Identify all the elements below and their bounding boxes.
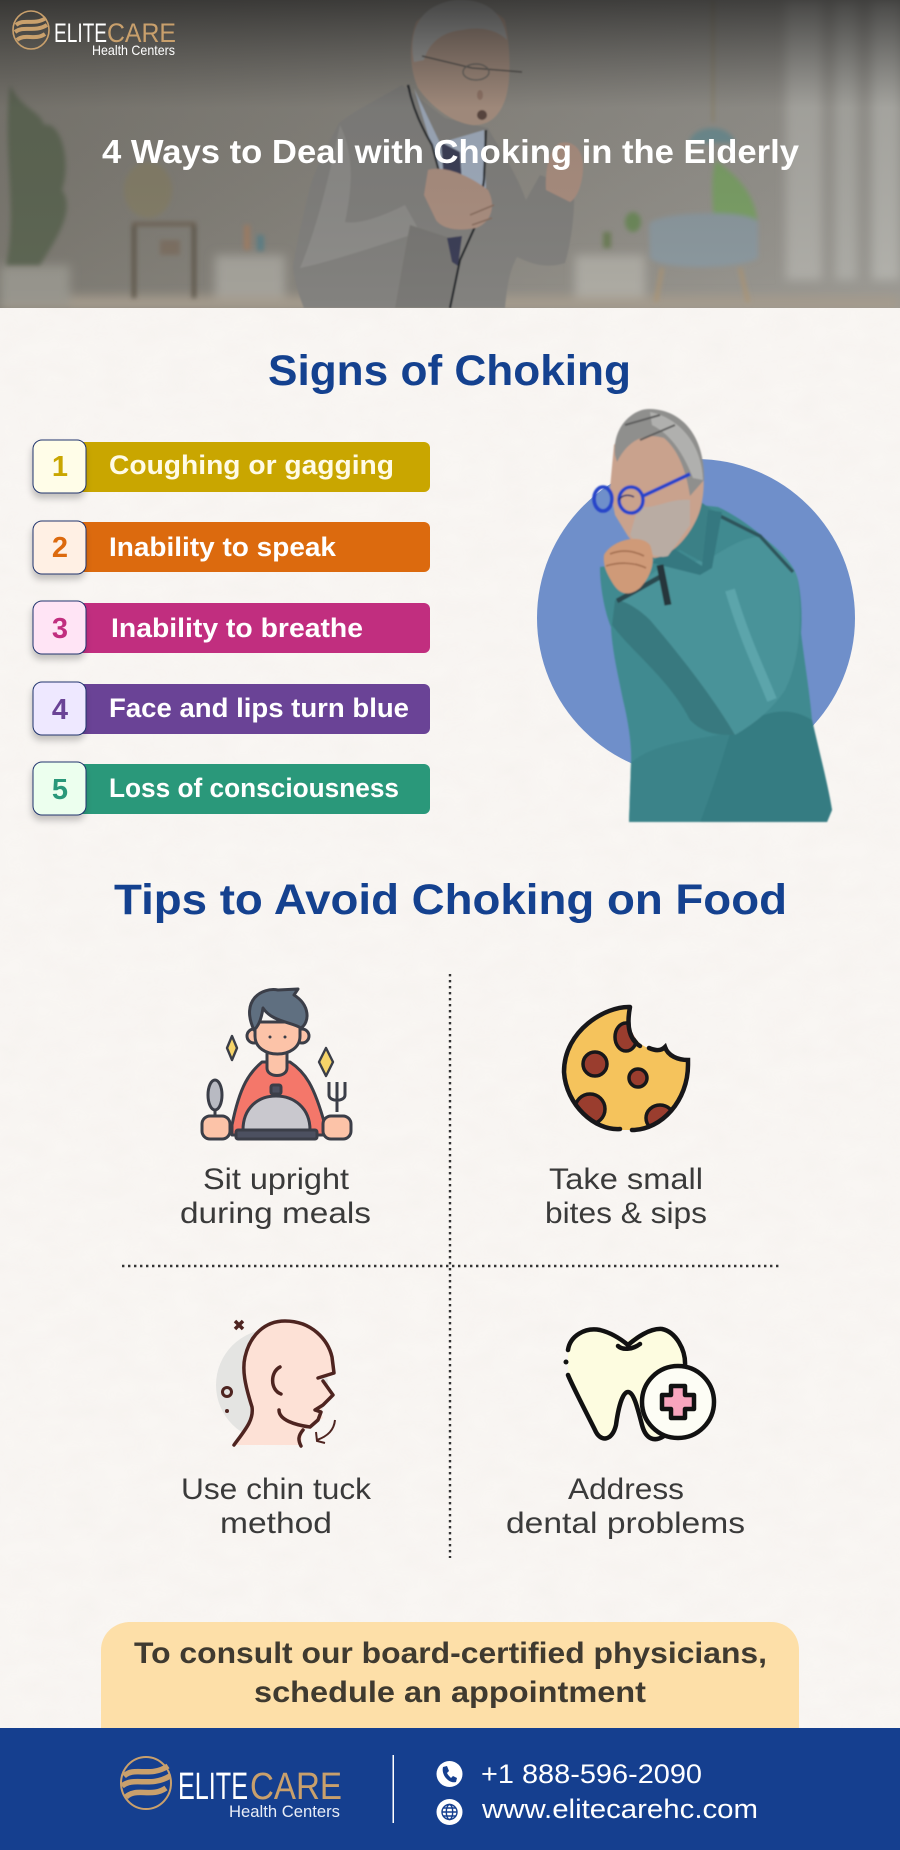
sign 5: 5: [52, 774, 68, 806]
tip: chin tuck: [181, 1321, 372, 1540]
sign 1: 1: [52, 451, 68, 483]
label: Take small: [549, 1163, 703, 1196]
sign 5: [33, 762, 430, 815]
logo: EliteCare header: ELITE: [54, 18, 107, 48]
divider: [392, 1755, 394, 1823]
logo: EliteCare footer: ELITE: [178, 1766, 248, 1808]
phone number: +1 888-596-2090: [481, 1759, 702, 1789]
call to action box: To consult our board-certified physicians,: [134, 1637, 767, 1670]
icon: bitten cookie: [564, 1007, 688, 1131]
label: [506, 1473, 745, 1540]
website: www.elitecarehc.com: [481, 1794, 758, 1824]
sign 1: [33, 440, 430, 493]
logo: EliteCare header: [13, 11, 176, 58]
icon: phone: [436, 1761, 462, 1787]
sign 5: Loss of consciousness: [109, 773, 399, 803]
logo: EliteCare footer: CARE: [250, 1766, 342, 1808]
label: bites & sips: [545, 1197, 707, 1230]
icon: tooth with plus badge: [564, 1329, 714, 1440]
tip: sit upright: [180, 989, 371, 1230]
label: [545, 1163, 707, 1230]
logo: EliteCare footer: Health Centers: [229, 1802, 340, 1821]
head: [610, 424, 704, 558]
logo: EliteCare footer: [121, 1757, 342, 1821]
sign 2: 2: [52, 532, 68, 564]
heading: Signs of Choking: Signs of Choking: [268, 347, 631, 395]
icon: globe: [436, 1799, 462, 1825]
footer band: [0, 1728, 900, 1850]
call to action box: [101, 1622, 799, 1728]
list: signs of choking: [33, 440, 430, 815]
sign 3: [33, 601, 430, 654]
label: Use chin tuck: [181, 1473, 372, 1506]
illustration: man coughing over blue circle: [537, 409, 855, 822]
neck and collar: [652, 500, 712, 563]
sign 4: [33, 682, 430, 735]
tip: dental problems: [506, 1329, 745, 1540]
icon: person dining: [202, 989, 351, 1139]
label: Sit upright: [203, 1163, 350, 1196]
title: 4 Ways to Deal with Choking in the Elderly: [102, 133, 800, 170]
header photo banner: [0, 0, 900, 310]
logo: EliteCare header: Health Centers: [92, 42, 175, 58]
sign 2: Inability to speak: [109, 532, 337, 562]
fist: [604, 539, 653, 593]
shirt body: [600, 505, 832, 822]
glasses: [594, 474, 690, 513]
sign 3: Inability to breathe: [111, 613, 363, 643]
heading: Tips to Avoid Choking on Food: Tips to Avoid Choking on Food: [114, 876, 787, 924]
sleeve arm: [615, 537, 800, 735]
label: [180, 1163, 371, 1230]
sign 4: 4: [52, 694, 68, 726]
label: method: [220, 1507, 332, 1540]
icon: photo of man clutching chest in grey sweater: [293, 0, 583, 308]
logo: EliteCare header: CARE: [107, 18, 176, 48]
sign 1: Coughing or gagging: [109, 450, 394, 480]
label: dental problems: [506, 1507, 745, 1540]
sign 3: 3: [52, 613, 68, 645]
sign 2: [33, 521, 430, 574]
label: Address: [568, 1473, 684, 1506]
sign 4: Face and lips turn blue: [109, 693, 409, 723]
label: [181, 1473, 372, 1540]
icon: head profile: [216, 1321, 335, 1446]
call to action box: schedule an appointment: [254, 1676, 646, 1709]
label: during meals: [180, 1197, 371, 1230]
dotted grid dividers: [122, 974, 780, 1558]
tip: small bites: [545, 1007, 707, 1230]
